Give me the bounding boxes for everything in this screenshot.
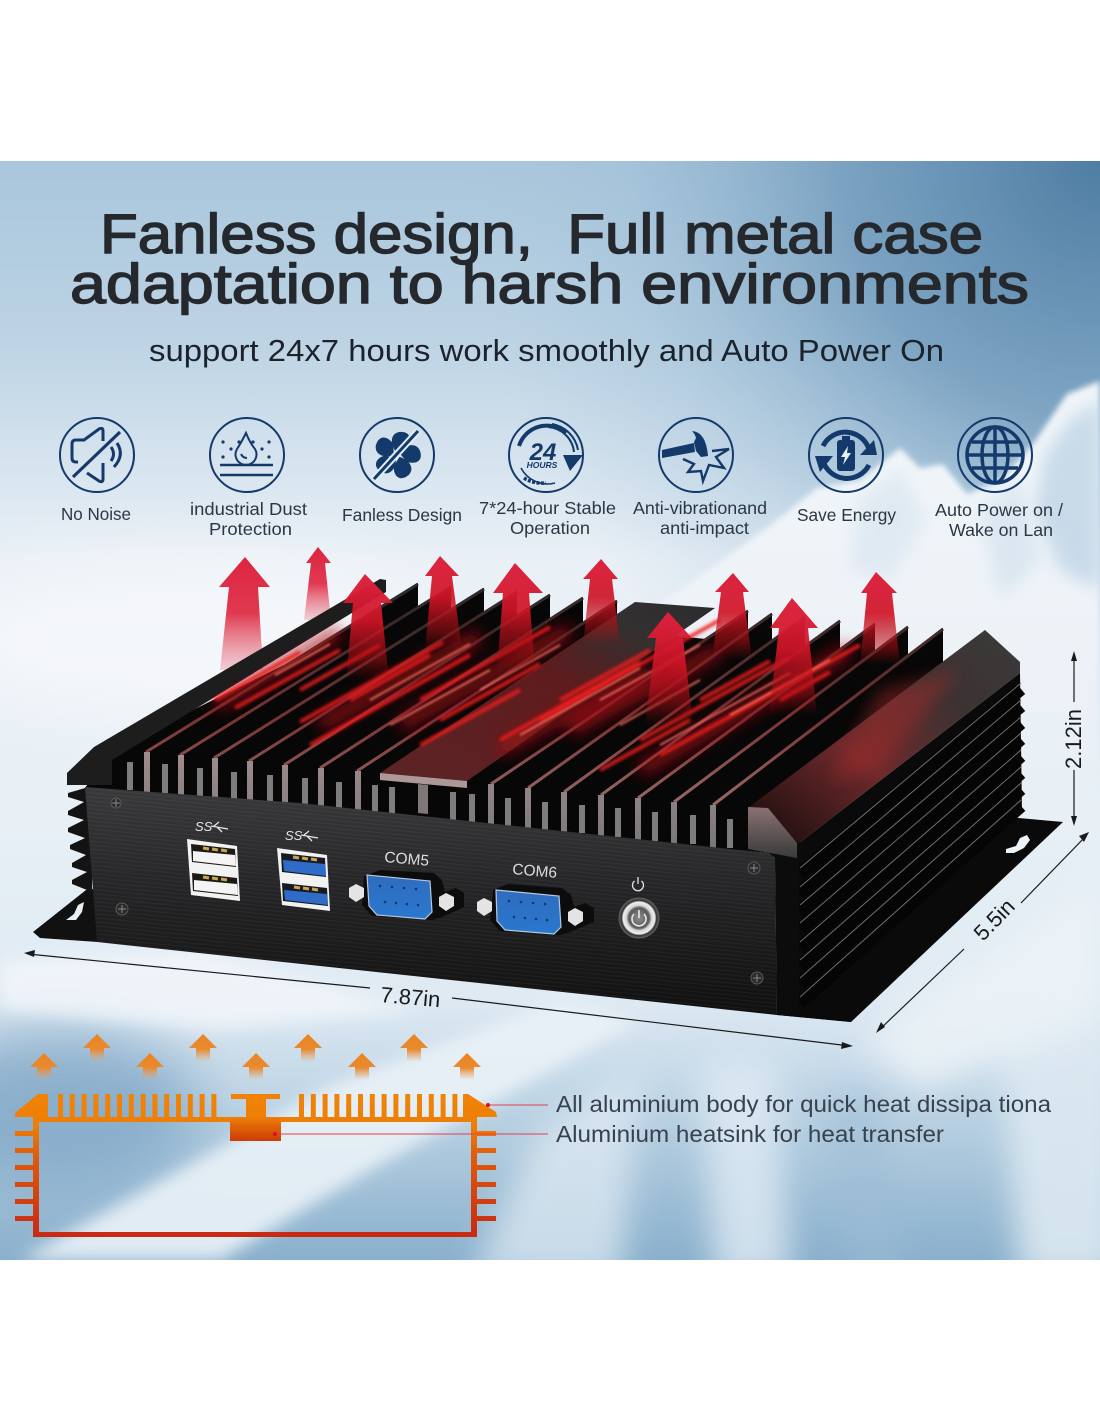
icon: 24 hours [509,418,583,492]
dimension: 2.12in height: 2.12in [1061,709,1086,769]
feature labels: No Noise [61,504,131,524]
icon: globe [958,418,1032,492]
dimension: 5.5in depth: 5.5in [969,894,1020,945]
heatsink cross-section diagram [15,1094,497,1237]
right mounting flange [777,817,1063,1022]
feature labels: Protection [209,519,292,539]
heatsink fin base [85,615,1000,853]
icon: 24 hours: HOURS [527,460,558,470]
feature labels: anti-impact [660,518,749,538]
feature labels: industrial Dust [190,499,307,519]
dimension: 5.5in depth [876,832,1089,1033]
feature labels: Save Energy [797,505,896,525]
SS label left: SS [195,819,213,834]
feature labels: Anti-vibrationand [633,498,767,518]
USB 2.0 ports [187,819,240,901]
left side fins [68,786,92,892]
front fin ends [144,752,716,848]
title: Fanless design, Full metal case [100,202,983,265]
T-shaped centre plate [380,602,715,814]
icon: save energy [809,418,883,492]
left mounting flange [33,888,98,942]
icon: no noise [60,418,134,492]
top fins [144,583,943,866]
COM6 port: COM6 [512,861,558,882]
title: adaptation to harsh environments [70,252,1029,315]
COM5 port [349,849,464,920]
right side fins [775,673,1022,1022]
small orange heat arrows [30,1034,481,1080]
USB 3.0 ports [277,828,330,911]
infographic canvas [0,161,1100,1260]
background: icy sky and snow [0,161,1100,1280]
icon: 24 hours: 24 [529,439,556,466]
callout: heatsink [273,1121,944,1147]
mini PC case [33,579,1063,1022]
heat arrows over case [343,556,900,725]
dimension: 7.87in width [24,950,853,1049]
feature labels [61,498,1063,540]
icon: fanless [360,418,434,492]
COM6 port [477,861,594,935]
right wing [749,630,1020,843]
power button [618,877,660,938]
callout: aluminium body: All aluminium body for quick heat dissipa tiona [556,1091,1051,1117]
title [70,202,1029,315]
red heat streaks [215,620,960,780]
feature labels: Fanless Design [342,505,462,525]
feature labels: 7*24-hour Stable [479,498,616,518]
icon: dust protection [210,418,284,492]
left wing [67,579,386,785]
SS label right: SS [285,828,303,843]
front panel [85,787,777,1015]
dimension: 7.87in width: 7.87in [380,982,441,1012]
feature labels: Operation [510,518,590,538]
subtitle: support 24x7 hours work smoothly and Auto Power On [149,333,944,368]
COM5 port: COM5 [384,849,430,870]
feature labels: Auto Power on / [935,500,1063,520]
panel screws [111,798,763,984]
icon: anti-impact hammer [659,418,733,492]
feature icon row [60,418,1032,492]
dimension: 2.12in height [1061,651,1086,826]
callout: heatsink: Aluminium heatsink for heat transfer [556,1121,944,1147]
heat arrows behind case [219,547,331,670]
feature labels: Wake on Lan [949,520,1053,540]
